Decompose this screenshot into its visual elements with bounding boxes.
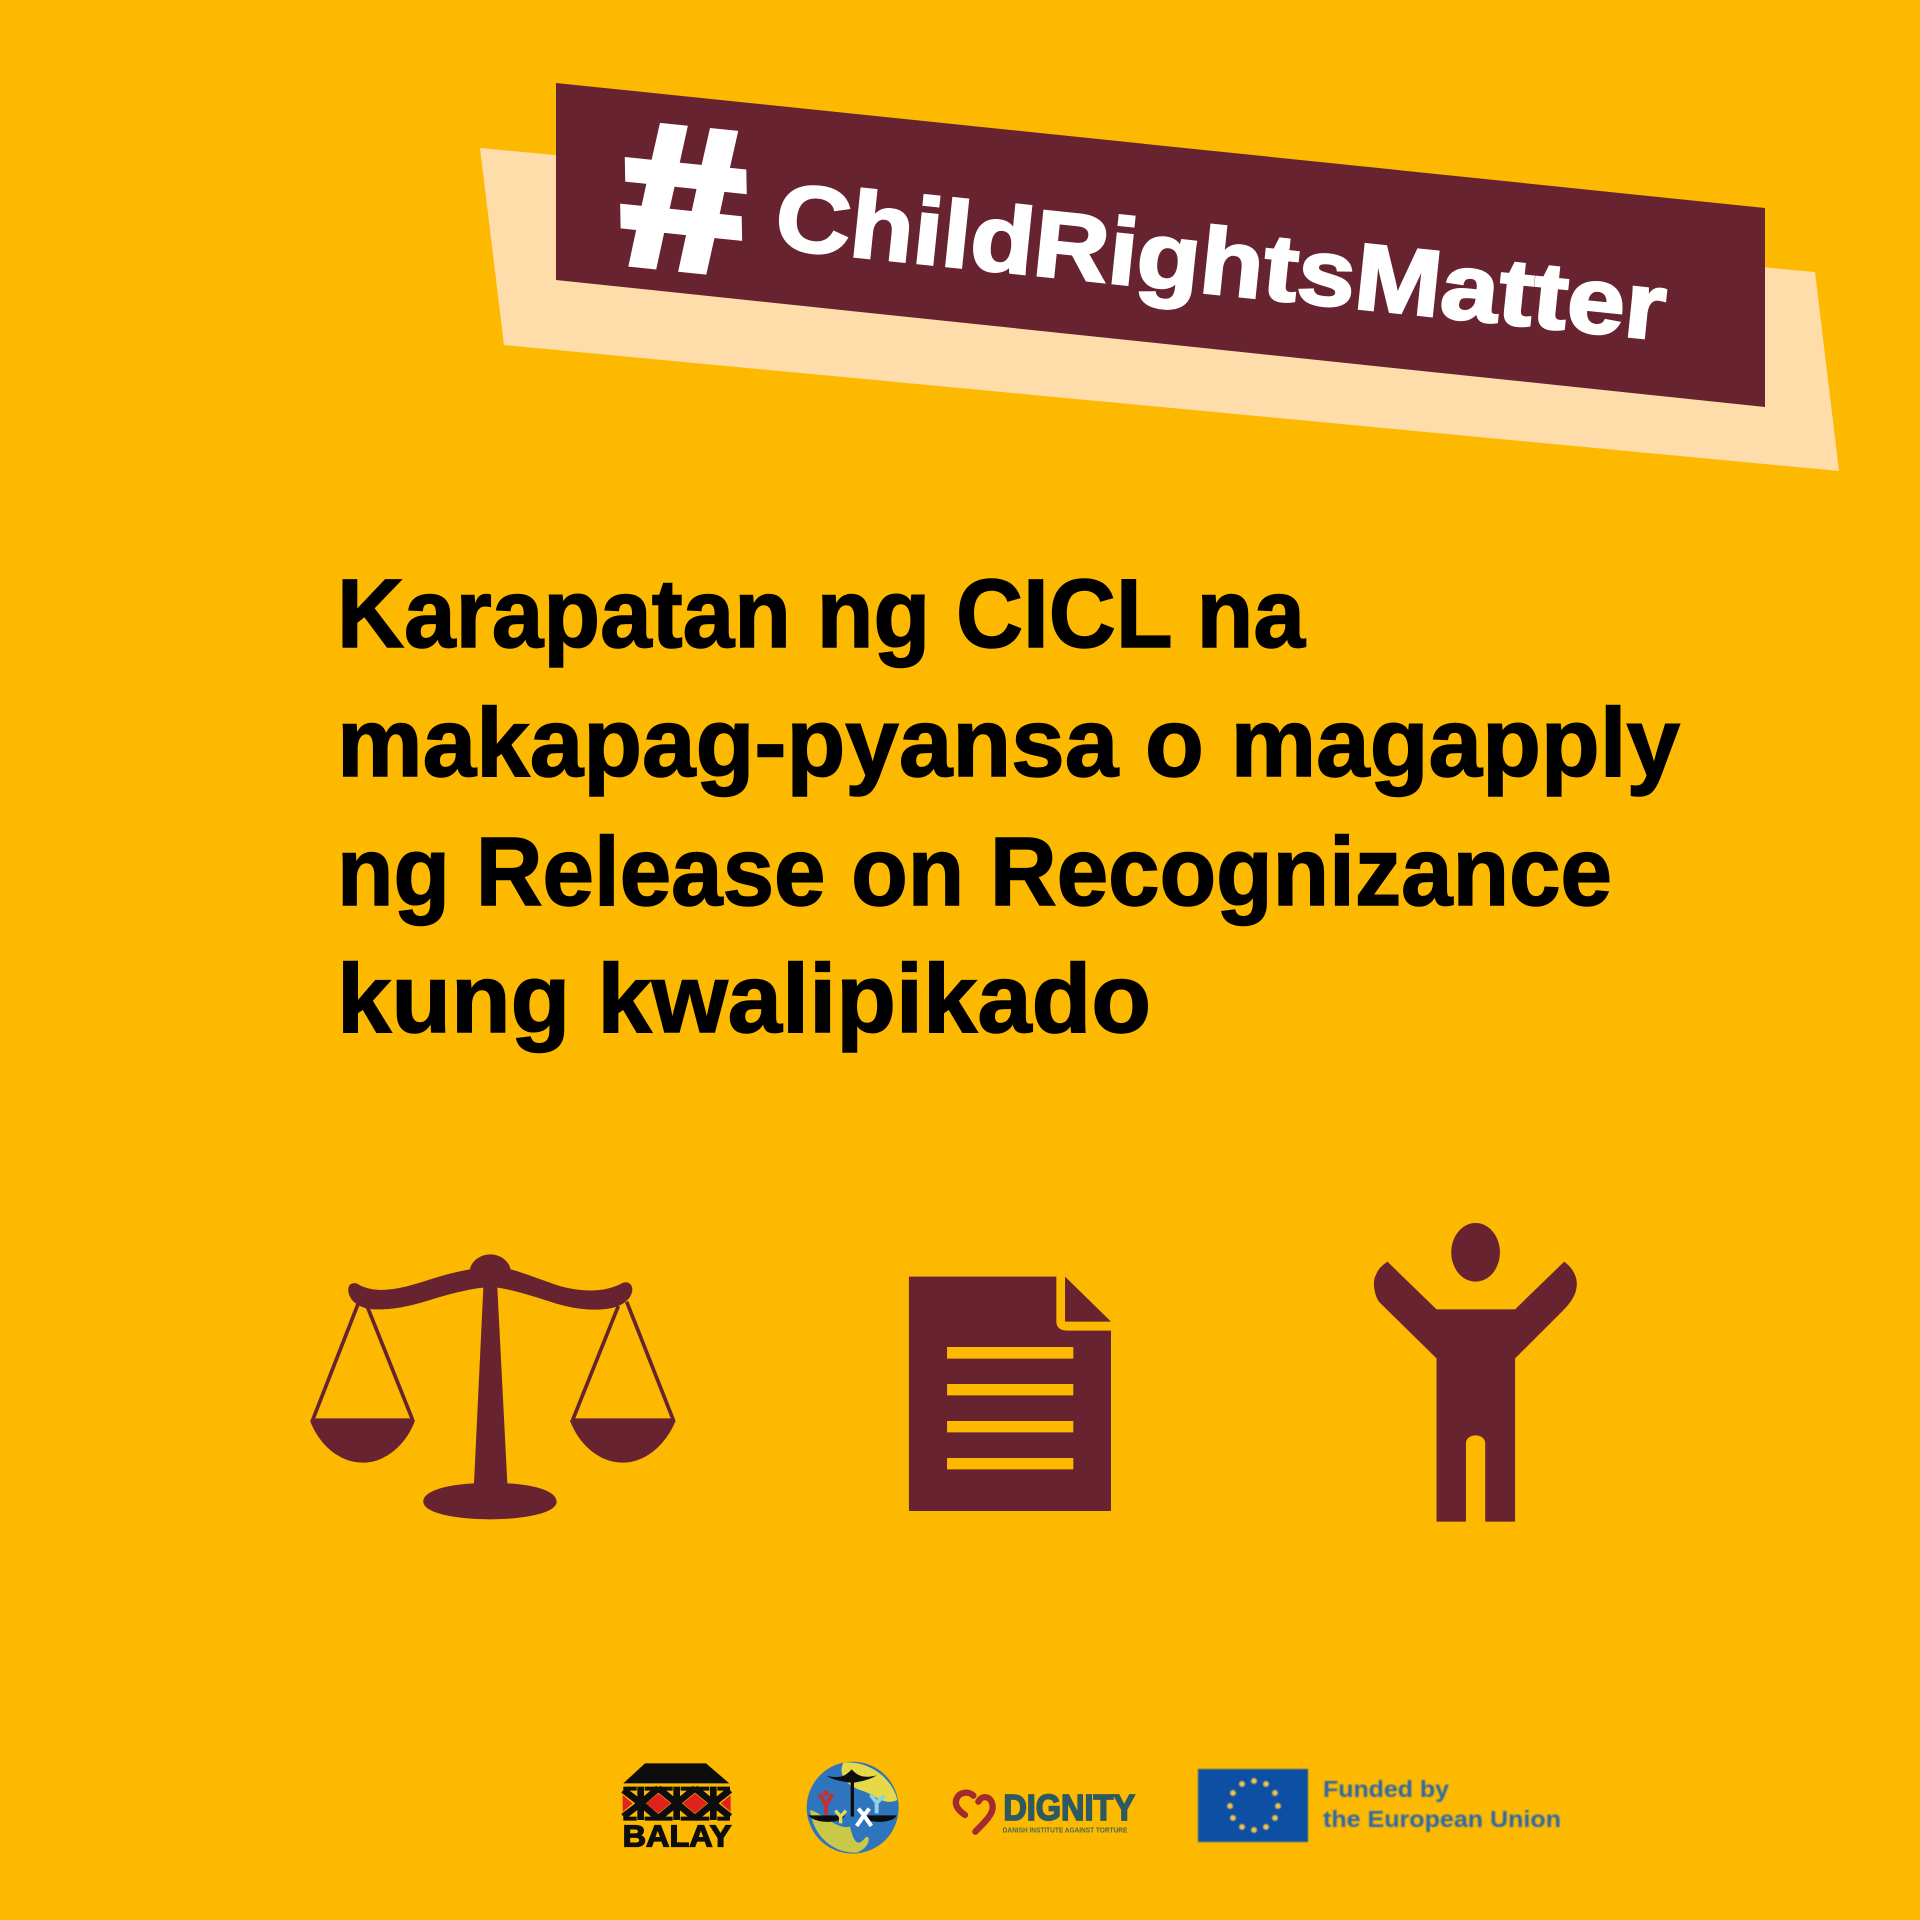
EU funding line 2: the European Union	[1323, 1806, 1561, 1832]
heading line 2: makapag-pyansa o magapply	[337, 688, 1680, 797]
icon: person with raised arms	[1374, 1223, 1577, 1522]
logo: Balay	[623, 1763, 731, 1854]
logo: Dignity	[956, 1787, 1135, 1835]
hashtag banner	[480, 78, 1839, 471]
EU funding line 1: Funded by	[1323, 1776, 1449, 1802]
hash symbol: #	[619, 78, 747, 317]
icon: scales of justice	[310, 1254, 676, 1519]
icon: document	[909, 1277, 1111, 1511]
heading line 1: Karapatan ng CICL na	[337, 559, 1306, 668]
Dignity heart mark	[956, 1793, 993, 1832]
EU flag	[1198, 1769, 1308, 1842]
Dignity wordmark: DIGNITY	[1003, 1787, 1135, 1828]
banner dark strip	[556, 83, 1765, 407]
Dignity tagline: DANISH INSTITUTE AGAINST TORTURE	[1003, 1826, 1127, 1835]
logo: globe with scales	[807, 1762, 899, 1854]
logo: European Union funding	[1198, 1769, 1561, 1842]
heading line 3: ng Release on Recognizance	[337, 817, 1612, 926]
Balay wordmark: BALAY	[623, 1820, 731, 1854]
main heading	[337, 559, 1680, 1053]
heading line 4: kung kwalipikado	[337, 944, 1151, 1053]
banner light backing strip	[480, 148, 1839, 471]
hashtag text: ChildRightsMatter	[771, 163, 1671, 360]
